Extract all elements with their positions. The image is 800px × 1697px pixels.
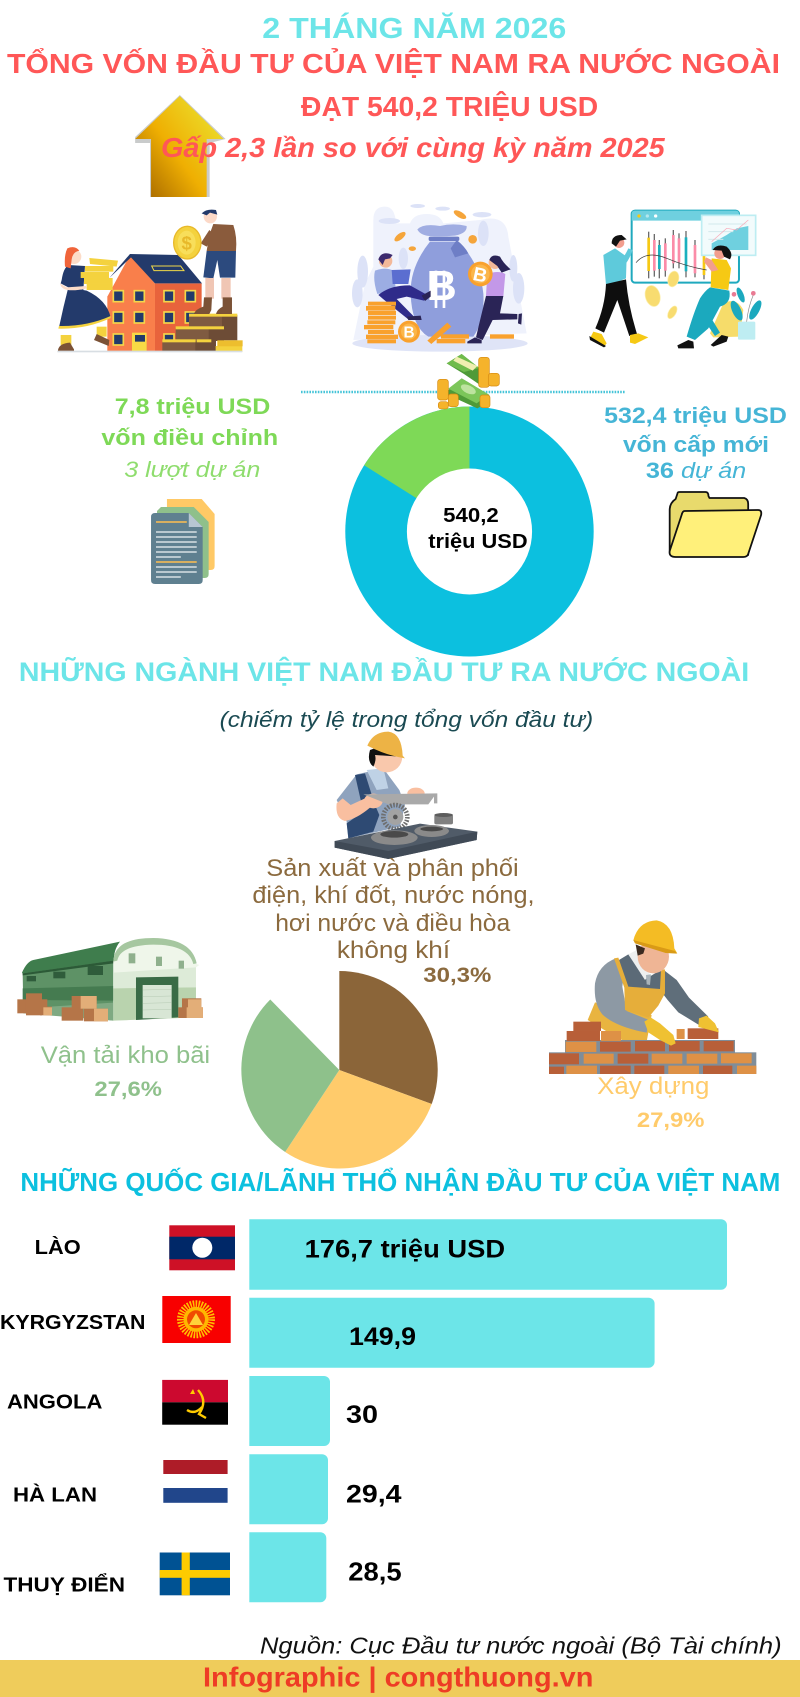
sector label: energy: Sản xuất và phân phối	[266, 855, 519, 882]
row: Sweden	[4, 1532, 402, 1602]
callout: new capital: 532,4 triệu USD	[604, 403, 787, 428]
chart: sector pie	[241, 971, 438, 1168]
icon: documents	[151, 499, 215, 584]
callout: new capital: 36 dự án	[646, 458, 746, 483]
man with laptop	[379, 254, 392, 268]
floating coins	[643, 270, 681, 320]
sector label: energy: 30,3%	[423, 964, 492, 987]
brick wall	[565, 1040, 735, 1053]
illustration: mechanic with gears	[335, 732, 477, 859]
row: Laos: LÀO	[35, 1236, 81, 1259]
walking man	[603, 248, 627, 285]
crates	[17, 993, 203, 1021]
row: Netherlands: HÀ LAN	[13, 1483, 97, 1506]
illustration: bitcoin money bag: B	[403, 324, 415, 341]
row: Kyrgyzstan: 149,9	[349, 1323, 416, 1351]
divider: dotted line	[301, 391, 625, 393]
shirt collar	[628, 950, 650, 980]
illustration: house and coins: $	[181, 232, 192, 253]
callout: adjusted capital: vốn điều chỉnh	[101, 425, 278, 450]
gloves	[644, 1018, 676, 1046]
vest	[619, 954, 664, 991]
row: Angola	[7, 1376, 378, 1446]
donut centre label: 540,2	[443, 505, 499, 527]
seated woman	[711, 258, 731, 290]
subheading: share note: (chiếm tỷ lệ trong tổng vốn đầu tư)	[220, 707, 593, 732]
apron bib and straps	[614, 958, 665, 1018]
sector label: energy: điện, khí đốt, nước nóng,	[252, 882, 535, 909]
title: total amount: ĐẠT 540,2 TRIỆU USD	[301, 91, 598, 122]
row: Kyrgyzstan: KYRGYZSTAN	[0, 1312, 145, 1334]
man	[204, 210, 217, 223]
row: Sweden: 28,5	[348, 1559, 402, 1587]
row: Laos	[35, 1219, 727, 1290]
head and helmet	[638, 940, 669, 973]
heading: recipient countries: NHỮNG QUỐC GIA/LÃNH THỔ NHẬN ĐẦU TƯ CỦA VIỆT NAM	[20, 1166, 780, 1197]
illustration: house and coins	[57, 210, 243, 352]
bar chart: investment by country	[0, 1219, 727, 1602]
footer band	[0, 1660, 800, 1697]
sector label: transport: 27,6%	[94, 1078, 162, 1101]
sector label: construction	[597, 1073, 709, 1132]
illustration: bricklayer	[549, 920, 756, 1074]
sector label: energy	[252, 855, 535, 987]
icon: folder	[670, 492, 761, 557]
illustration: bitcoin money bag: B	[471, 264, 489, 288]
callout: adjusted capital: 3 lượt dự án	[124, 457, 260, 482]
illustration: bitcoin money bag	[352, 204, 528, 352]
callout: new capital: vốn cấp mới	[623, 432, 769, 457]
callout: adjusted capital: 7,8 triệu USD	[115, 394, 270, 419]
chart: capital donut	[345, 406, 594, 656]
donut centre label	[428, 505, 528, 553]
row: Netherlands	[13, 1454, 402, 1524]
woman	[61, 265, 85, 290]
plant	[738, 322, 755, 340]
right sleeve	[660, 968, 708, 1025]
callout: adjusted capital	[101, 394, 278, 482]
lower apron	[588, 1002, 652, 1042]
footer band: Infographic | congthuong.vn	[203, 1662, 593, 1693]
sector label: energy: hơi nước và điều hòa	[275, 910, 511, 937]
row: Sweden: THUỴ ĐIỂN	[4, 1574, 125, 1596]
subtitle: comparison: Gấp 2,3 lần so với cùng kỳ năm 2025	[161, 132, 665, 163]
left sleeve	[595, 958, 649, 1033]
yellow coin pile	[710, 301, 743, 337]
illustration: bitcoin money bag: B	[427, 262, 457, 309]
sector label: transport	[41, 1042, 210, 1101]
coin stacks	[364, 302, 514, 343]
donut centre label: triệu USD	[428, 531, 528, 553]
row: Netherlands: 29,4	[346, 1480, 402, 1508]
title block	[7, 11, 780, 163]
sector label: construction: Xây dựng	[597, 1073, 709, 1100]
row: Angola: 30	[346, 1401, 378, 1429]
sector label: energy: không khí	[337, 937, 450, 964]
illustration: investors and chart	[589, 211, 764, 348]
heading: sectors: NHỮNG NGÀNH VIỆT NAM ĐẦU TƯ RA NƯỚC NGOÀI	[19, 656, 749, 687]
sector label: construction: 27,9%	[637, 1109, 705, 1132]
row: Angola: ANGOLA	[7, 1391, 102, 1413]
sector label: transport: Vận tải kho bãi	[41, 1042, 210, 1069]
title: period: 2 THÁNG NĂM 2026	[262, 11, 566, 45]
woman with coin	[489, 256, 501, 269]
callout: new capital	[604, 403, 787, 483]
title: main headline: TỔNG VỐN ĐẦU TƯ CỦA VIỆT NAM RA NƯỚC NGOÀI	[7, 47, 780, 79]
gold and brown steps	[162, 315, 237, 352]
icon: gold up arrow	[135, 95, 226, 197]
row: Laos: 176,7 triệu USD	[305, 1236, 505, 1264]
source note: Nguồn: Cục Đầu tư nước ngoài (Bộ Tài chính)	[260, 1632, 782, 1658]
illustration: warehouse	[17, 938, 203, 1021]
row: Kyrgyzstan	[0, 1296, 655, 1368]
icon: money and coins on donut	[438, 354, 499, 409]
